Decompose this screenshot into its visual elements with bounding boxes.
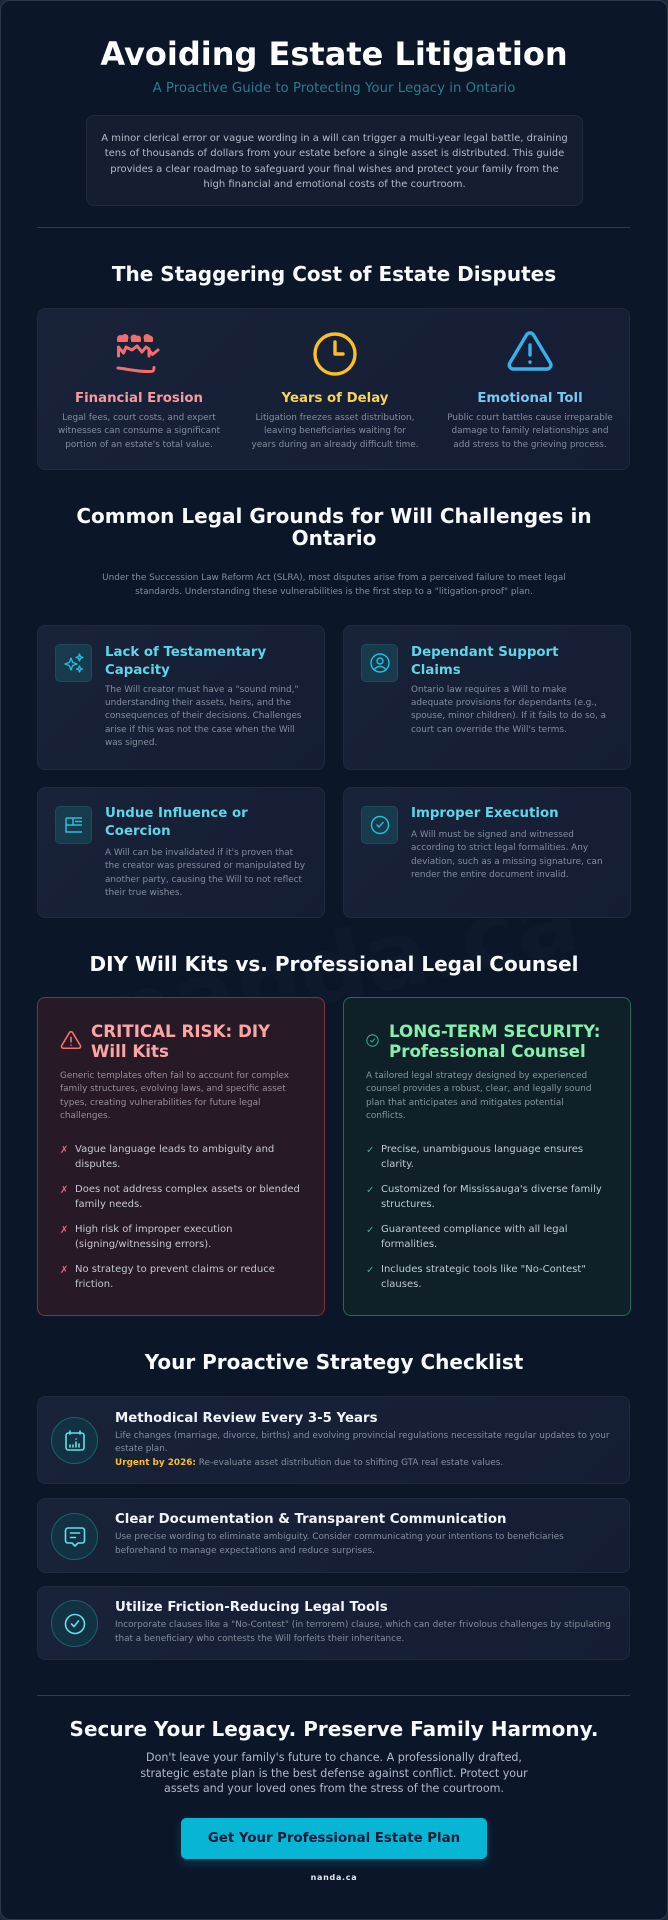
item: (signing/witnessing errors).	[75, 1239, 211, 1250]
item: family needs.	[75, 1199, 142, 1210]
item: ✗	[60, 1225, 68, 1236]
item: ✓	[366, 1145, 374, 1156]
text: years of delay	[251, 413, 419, 450]
step text	[115, 1431, 610, 1468]
text: financial erosion: witnesses can consume a significant	[58, 426, 220, 436]
intro text box: high financial and emotional costs of the courtroom.	[203, 179, 466, 190]
icon: financial erosion	[116, 334, 160, 373]
item	[60, 1224, 232, 1250]
step: friction tools	[37, 1586, 630, 1660]
legal grounds intro text	[102, 573, 566, 597]
icon: sparkles	[55, 644, 92, 682]
item: Customized for Mississauga's diverse family	[381, 1184, 602, 1194]
step text	[115, 1532, 564, 1556]
item: ✗	[60, 1145, 68, 1156]
icon: message	[50, 1512, 98, 1560]
item	[366, 1224, 568, 1250]
item: clarity.	[381, 1159, 414, 1170]
panel title: Professional Counsel	[389, 1040, 586, 1060]
heading: legal grounds: Common Legal Grounds for Will Challenges in	[76, 504, 592, 528]
card title: Improper Execution	[411, 806, 559, 821]
item	[60, 1264, 275, 1290]
icon: clock	[313, 332, 357, 376]
panel text	[366, 1071, 591, 1121]
card text: The Will creator must have a "sound mind,"	[105, 685, 299, 695]
icon: check circle	[50, 1600, 98, 1647]
column: years of delay	[251, 332, 419, 450]
panel title: CRITICAL RISK: DIY	[91, 1020, 270, 1040]
text: emotional toll	[447, 413, 613, 450]
step text: estate plan.	[115, 1444, 168, 1454]
item: disputes.	[75, 1159, 120, 1170]
panel text: plan that anticipates and mitigates potential	[366, 1098, 564, 1108]
panel title	[91, 1020, 270, 1060]
icon: scales chart	[55, 806, 92, 844]
card title: Lack of Testamentary	[105, 645, 266, 660]
text: financial erosion	[58, 413, 220, 450]
text: emotional toll: damage to family relationships and	[451, 426, 609, 436]
step title: Clear Documentation & Transparent Communication	[115, 1512, 506, 1527]
watermark: nanda.ca	[98, 865, 588, 1069]
icon: calendar	[50, 1417, 98, 1464]
card text: their true wishes.	[105, 888, 182, 898]
item: ✓	[366, 1225, 374, 1236]
icon: check	[366, 1034, 379, 1047]
card: testamentary capacity	[37, 625, 325, 770]
intro text box: A minor clerical error or vague wording in a will can trigger a multi-year legal battle, draining	[101, 132, 568, 144]
card title: Coercion	[105, 824, 171, 839]
heading: legal grounds: Ontario	[292, 526, 376, 550]
button	[181, 1818, 487, 1859]
panel text: counsel provides a robust, clear, and legally sound	[366, 1084, 591, 1094]
card text: arise if this was not the case when the Will	[105, 725, 295, 735]
text: years of delay: Litigation freezes asset distribution,	[256, 413, 414, 423]
item: structures.	[381, 1199, 435, 1210]
step text: beforehand to manage expectations and reduce surprises.	[115, 1546, 375, 1556]
legal grounds intro text: Under the Succession Law Reform Act (SLRA), most disputes arise from a perceived failure to meet legal	[102, 573, 566, 583]
card text	[411, 830, 603, 880]
panel text: types, creating vulnerabilities for future legal	[60, 1098, 260, 1108]
card title	[105, 645, 266, 678]
item	[60, 1184, 300, 1210]
heading: call to action: Secure Your Legacy. Preserve Family Harmony.	[70, 1717, 598, 1741]
item	[366, 1184, 602, 1210]
call to action text: assets and your loved ones from the stress of the courtroom.	[164, 1782, 504, 1795]
card title	[105, 806, 248, 839]
card text: deviation, such as a missing signature, can	[411, 857, 603, 867]
icon: warning triangle	[508, 331, 553, 371]
card text: the creator was pressured or manipulated by	[105, 861, 305, 871]
item: Precise, unambiguous language ensures	[381, 1144, 583, 1154]
column: financial erosion	[58, 334, 220, 450]
risk list	[60, 1144, 300, 1290]
item: No strategy to prevent claims or reduce	[75, 1264, 275, 1274]
card: improper execution	[343, 787, 631, 918]
intro text box	[86, 115, 583, 206]
subtitle: A Proactive Guide to Protecting Your Legacy in Ontario	[153, 80, 515, 96]
panel text: family structures, evolving laws, and specific asset	[60, 1084, 286, 1094]
panel title: Will Kits	[91, 1040, 169, 1060]
panel text: A tailored legal strategy designed by experienced	[366, 1071, 587, 1081]
text: years of delay: years during an already difficult time.	[251, 440, 419, 450]
heading: emotional toll: Emotional Toll	[477, 390, 583, 406]
card: undue influence	[37, 787, 325, 918]
card text: Ontario law requires a Will to make	[411, 685, 567, 695]
card text: court can override the Will's terms.	[411, 725, 567, 735]
icon: check circle	[361, 806, 398, 844]
step text: that a beneficiary who contests the Will forfeits their inheritance.	[115, 1634, 404, 1644]
card text: spouse, minor children). If it fails to do so, a	[411, 711, 606, 721]
step text: Life changes (marriage, divorce, births) and evolving provincial regulations necessitate regular updates to your	[115, 1431, 610, 1441]
legal grounds intro text: standards. Understanding these vulnerabilities is the first step to a "litigation-proof" plan.	[135, 587, 533, 597]
call to action text: strategic estate plan is the best defense against conflict. Protect your	[140, 1767, 528, 1780]
card text: was signed.	[105, 738, 157, 748]
card title: Capacity	[105, 663, 170, 678]
item: Guaranteed compliance with all legal	[381, 1224, 568, 1234]
item: Vague language leads to ambiguity and	[75, 1144, 274, 1154]
panel text: challenges.	[60, 1111, 110, 1121]
card text: adequate provisions for dependants (e.g.,	[411, 698, 597, 708]
card text: understanding their assets, heirs, and the	[105, 698, 291, 708]
card: dependant support	[343, 625, 631, 770]
card title	[411, 645, 558, 678]
item: ✗	[60, 1265, 68, 1276]
item: clauses.	[381, 1279, 422, 1290]
item: ✓	[366, 1265, 374, 1276]
card title: Dependant Support	[411, 645, 558, 660]
panel text: Generic templates often fail to account for complex	[60, 1071, 289, 1081]
card text	[411, 685, 606, 735]
step text: Use precise wording to eliminate ambiguity. Consider communicating your intentions to beneficiaries	[115, 1532, 564, 1542]
icon: warning	[60, 1030, 82, 1049]
button: Get Your Professional Estate Plan	[208, 1831, 460, 1846]
panel title: LONG-TERM SECURITY:	[389, 1020, 600, 1040]
item: High risk of improper execution	[75, 1224, 232, 1234]
heading: DIY vs professional: DIY Will Kits vs. Professional Legal Counsel	[89, 952, 578, 976]
footer brand: nanda.ca	[311, 1873, 357, 1882]
step text: Incorporate clauses like a "No-Contest" (in terrorem) clause, which can deter frivolous challenges by stipulating	[115, 1620, 611, 1630]
title: Avoiding Estate Litigation	[100, 34, 568, 72]
card text: render the entire document invalid.	[411, 870, 569, 880]
heading: financial erosion: Financial Erosion	[75, 390, 203, 406]
card text	[105, 685, 302, 748]
item: ✓	[366, 1185, 374, 1196]
heading: legal grounds	[76, 504, 592, 550]
text: financial erosion: Legal fees, court costs, and expert	[62, 413, 216, 423]
item: ✗	[60, 1185, 68, 1196]
text: emotional toll: add stress to the grieving process.	[453, 440, 607, 450]
item	[366, 1144, 583, 1170]
panel title	[389, 1020, 600, 1060]
step: methodical review	[37, 1396, 630, 1484]
step: documentation	[37, 1498, 630, 1573]
item: formalities.	[381, 1239, 437, 1250]
column: emotional toll	[447, 331, 613, 450]
card text: according to strict legal formalities. Any	[411, 843, 588, 853]
item: friction.	[75, 1279, 113, 1290]
item: Includes strategic tools like "No-Contest"	[381, 1264, 586, 1274]
card title: Claims	[411, 663, 461, 678]
text: financial erosion: portion of an estate's total value.	[65, 440, 213, 450]
card text: A Will can be invalidated if it's proven that	[105, 848, 293, 858]
intro text box: provides a clear roadmap to safeguard your final wishes and protect your family from the	[110, 164, 559, 174]
step title: Methodical Review Every 3-5 Years	[115, 1411, 378, 1426]
heading: cost of disputes: The Staggering Cost of Estate Disputes	[112, 262, 556, 286]
card text	[105, 848, 305, 898]
panel: costs	[37, 308, 630, 470]
intro text box: tens of thousands of dollars from your estate before a single asset is distributed. This guide	[105, 148, 564, 159]
heading: checklist: Your Proactive Strategy Checklist	[145, 1350, 523, 1374]
panel: DIY will kits	[37, 997, 325, 1316]
step title: Utilize Friction-Reducing Legal Tools	[115, 1600, 388, 1615]
icon: user circle	[361, 644, 398, 682]
item	[60, 1144, 274, 1170]
card text: A Will must be signed and witnessed	[411, 830, 574, 840]
step text	[115, 1620, 611, 1644]
text: years of delay: leaving beneficiaries waiting for	[264, 426, 406, 436]
card title: Undue Influence or	[105, 806, 248, 821]
call to action text: Don't leave your family's future to chance. A professionally drafted,	[146, 1751, 522, 1764]
panel text: conflicts.	[366, 1111, 406, 1121]
text: emotional toll: Public court battles cause irreparable	[447, 413, 613, 423]
call to action text	[140, 1751, 528, 1795]
heading: years of delay: Years of Delay	[282, 390, 388, 406]
panel: professional counsel	[343, 997, 631, 1316]
item	[366, 1264, 586, 1290]
step text: Urgent by 2026: Re-evaluate asset distribution due to shifting GTA real estate values.	[115, 1458, 503, 1468]
benefits list	[366, 1144, 602, 1290]
item: Does not address complex assets or blended	[75, 1184, 300, 1194]
card text: another party, causing the Will to not reflect	[105, 875, 302, 885]
card text: consequences of their decisions. Challenges	[105, 711, 302, 721]
panel text	[60, 1071, 289, 1121]
